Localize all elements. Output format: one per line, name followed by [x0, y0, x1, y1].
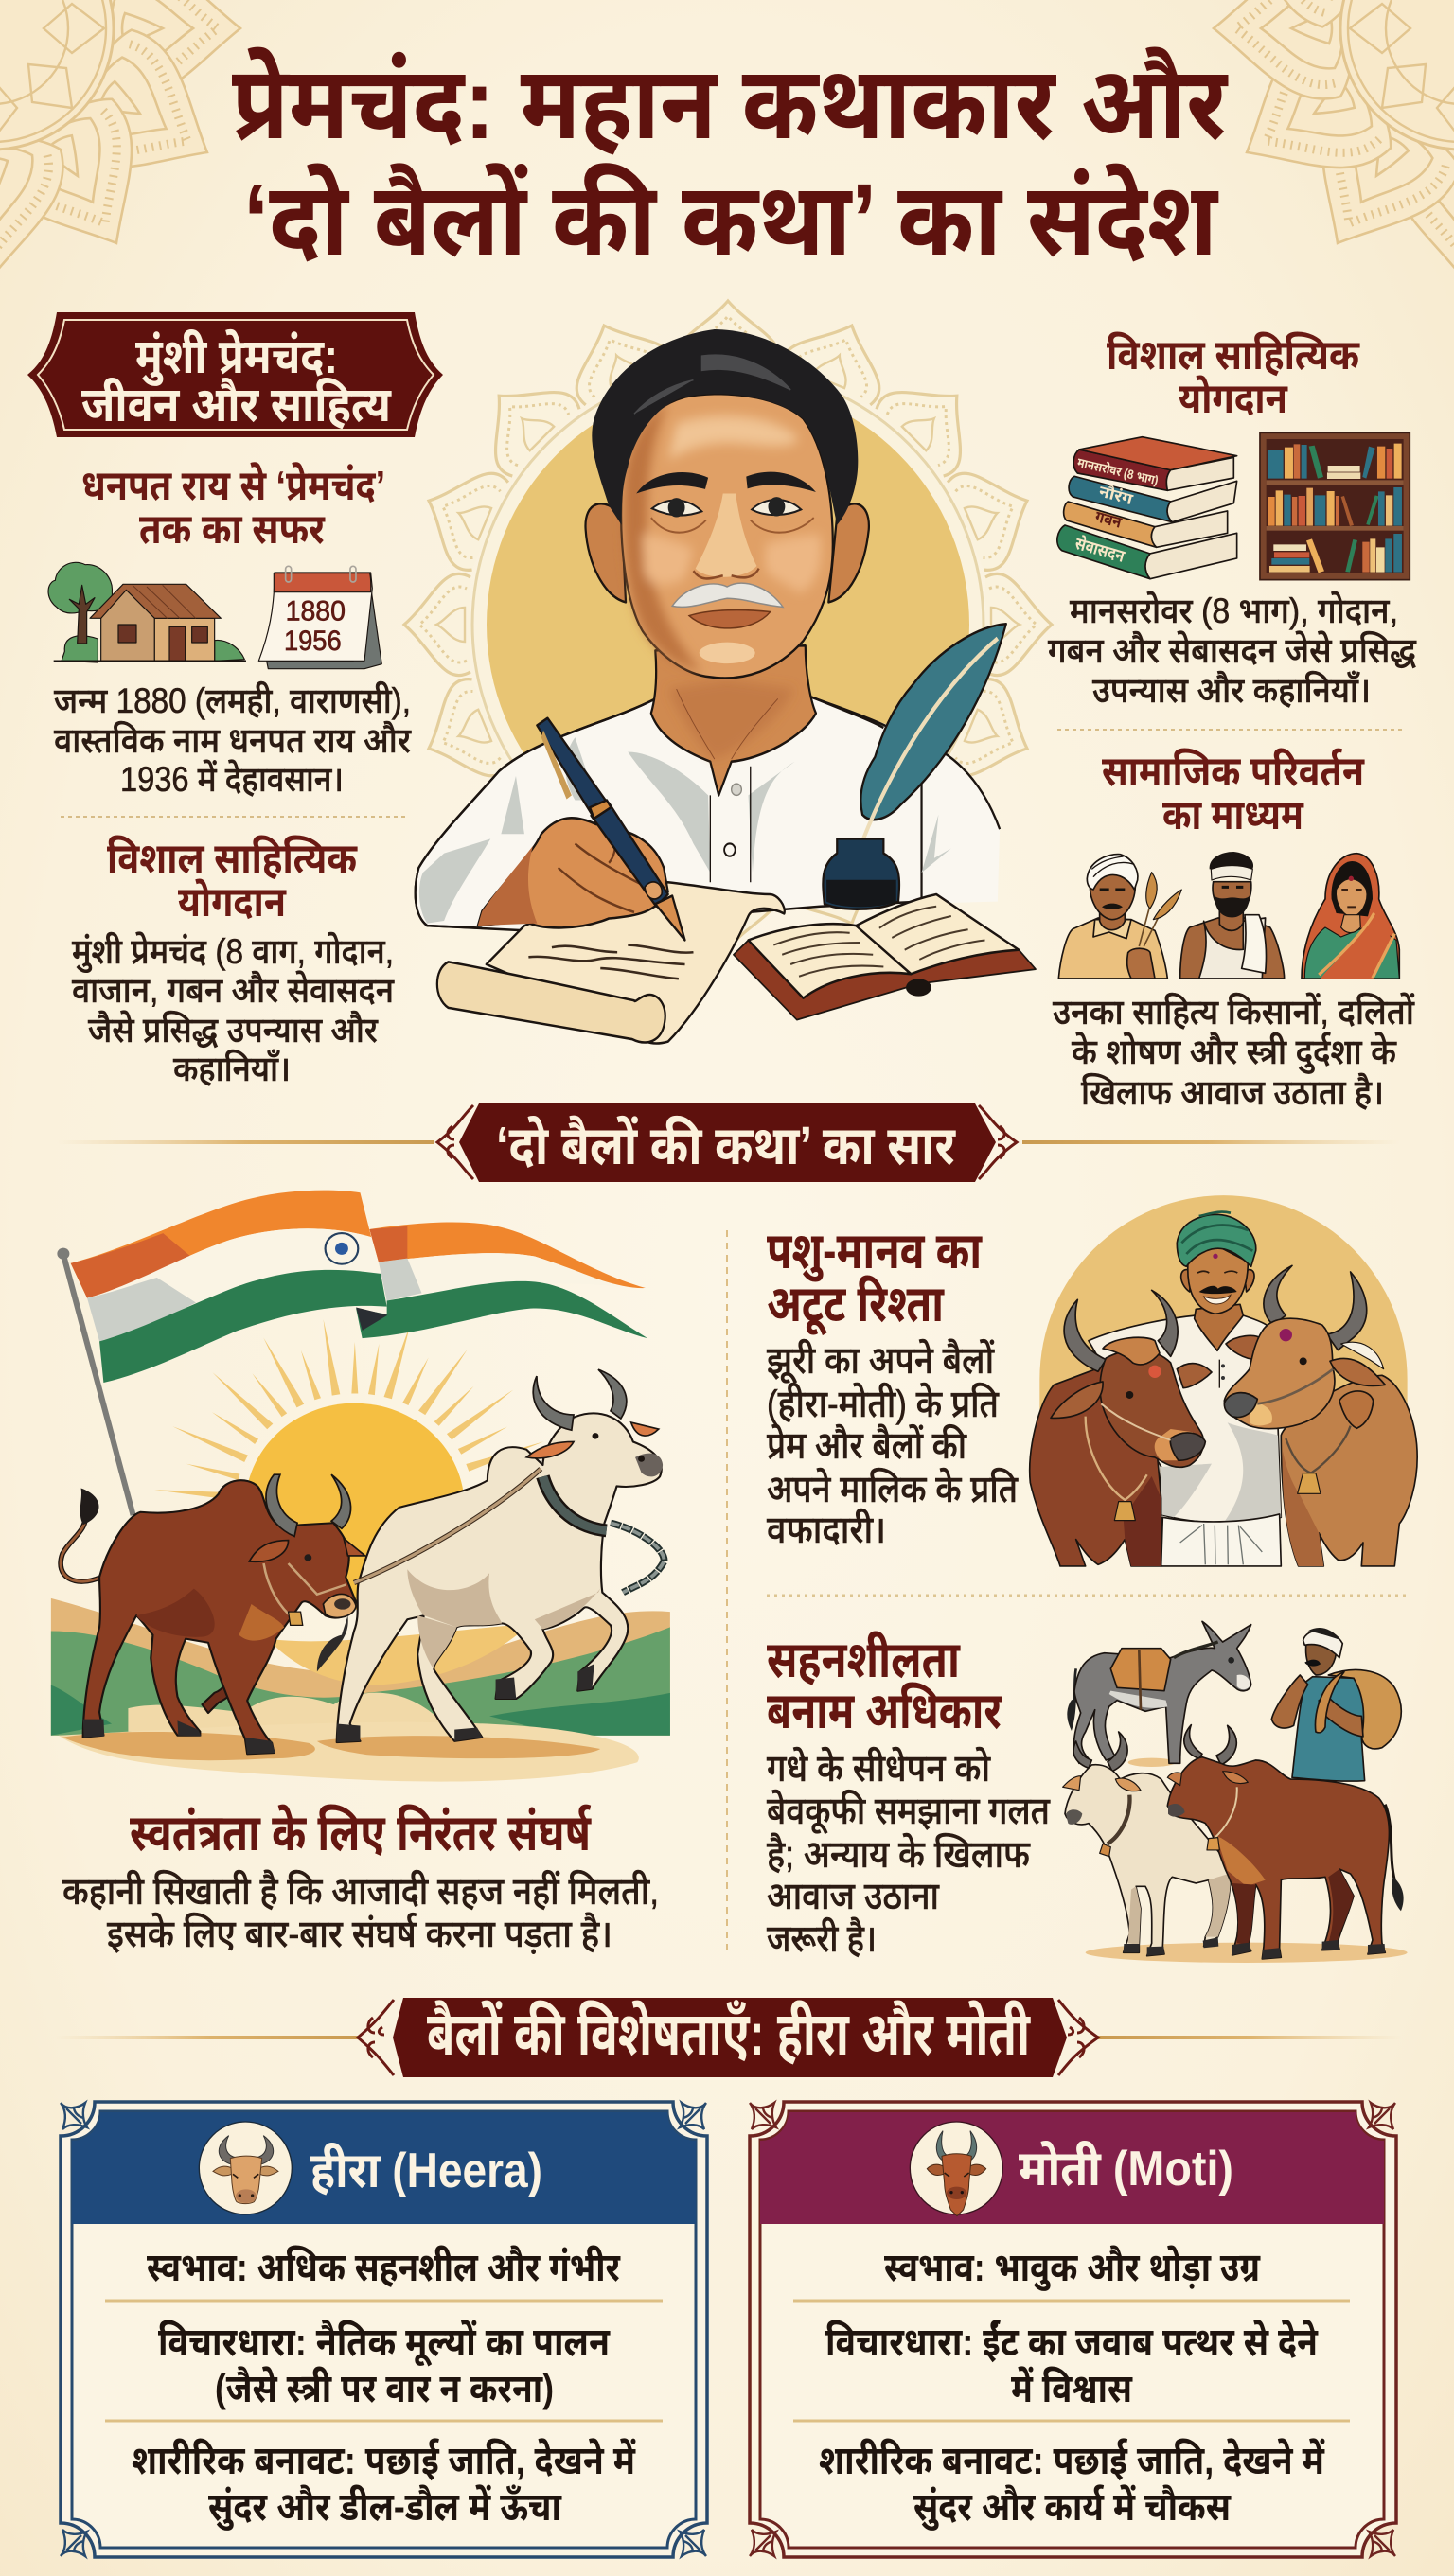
central mandala halo with golden disc — [404, 301, 1052, 948]
trait: physique: शारीरिक बनावट: पछाई जाति, देखने में — [132, 2438, 636, 2482]
text: bond: झूरी का अपने बैलों — [767, 1338, 995, 1384]
trait: ideology: में विश्वास — [1011, 2366, 1133, 2410]
left column block: Dhanpat Rai to Premchand — [48, 461, 412, 799]
icon: stack of books — [1057, 437, 1237, 579]
face shading — [623, 404, 822, 672]
trait: physique — [819, 2438, 1325, 2531]
text: literary contribution: वाजान, गबन और सेवासदन — [72, 970, 395, 1010]
text: famous works: गबन और सेबासदन जेसे प्रसिद्ध — [1048, 630, 1417, 670]
text: birth and death: वास्तविक नाम धनपत राय और — [54, 721, 412, 760]
trait: temperament: स्वभाव: अधिक सहनशील और गंभीर — [147, 2245, 621, 2289]
book spine labels: गबन — [1093, 507, 1125, 532]
calendar years: 1956 — [284, 626, 342, 657]
right column block: literary contribution — [1048, 331, 1417, 710]
farmer — [1089, 1315, 1281, 1523]
text: tolerance: है; अन्याय के खिलाफ — [767, 1832, 1031, 1876]
heading: social change: का माध्यम — [1162, 792, 1304, 838]
brown bull — [1030, 1366, 1161, 1566]
text: tolerance: आवाज उठाना — [767, 1876, 940, 1917]
section banner: traits of the bulls — [56, 1998, 1401, 2077]
text: tolerance: बेवकूफी समझाना गलत — [767, 1789, 1051, 1834]
card header — [760, 2112, 1384, 2224]
heading and text: constant struggle for freedom — [62, 1804, 659, 1955]
title — [232, 45, 1229, 276]
text: bond: प्रेम और बैलों की — [767, 1423, 967, 1467]
hand — [478, 818, 668, 927]
heading: bond: पशु-मानव का — [767, 1223, 983, 1283]
section banner: essence of the story — [56, 1103, 1401, 1182]
text: tolerance: गधे के सीधेपन को — [767, 1746, 991, 1790]
quill feather — [860, 624, 1006, 820]
card title: Heera: हीरा (Heera) — [310, 2144, 542, 2198]
heading: tolerance: बनाम अधिकार — [767, 1682, 1002, 1739]
text: famous works — [1048, 591, 1417, 710]
flag tricolour — [369, 1222, 646, 1288]
heading: journey: धनपत राय से ‘प्रेमचंद’ — [81, 461, 385, 509]
trait: temperament: स्वभाव: भावुक और थोड़ा उग्र — [884, 2245, 1261, 2291]
heading: journey — [81, 461, 385, 553]
text: voice of the oppressed: खिलाफ आवाज उठाता है। — [1081, 1073, 1384, 1112]
text: tolerance — [767, 1746, 1051, 1960]
trait: physique: सुंदर और डील-डौल में ऊँचा — [208, 2484, 562, 2531]
trait: ideology: विचारधारा: नैतिक मूल्यों का पालन — [158, 2320, 611, 2367]
trait: ideology — [825, 2320, 1319, 2410]
card frame — [61, 2102, 707, 2557]
ink bottle — [823, 838, 899, 909]
fingertip — [645, 882, 662, 899]
white bull — [317, 1369, 665, 1742]
text: bond: (हीरा-मोती) के प्रति — [767, 1382, 1000, 1425]
heading: journey: तक का सफर — [139, 506, 326, 553]
text: lesson: कहानी सिखाती है कि आजादी सहज नहीं मिलती, — [62, 1870, 659, 1913]
ears — [585, 503, 626, 602]
scroll — [487, 882, 785, 1044]
text: birth and death — [54, 681, 412, 799]
icon: Heera bull head — [199, 2122, 292, 2214]
banner: Munshi Premchand life and literature — [27, 312, 443, 437]
decorative corner mandala: top right — [1212, 0, 1454, 278]
heading: literary contribution — [1107, 331, 1360, 422]
trait: ideology — [158, 2320, 611, 2410]
card: Heera — [61, 2102, 707, 2557]
book spine labels: मानसरोवर (8 भाग) — [1076, 455, 1160, 487]
text: literary contribution: मुंशी प्रेमचंद (8 वाग, गोदान, — [72, 931, 394, 973]
heading: literary contribution: विशाल साहित्यिक — [107, 835, 358, 882]
portrait of Premchand writing — [416, 329, 1036, 1044]
open book — [734, 940, 1036, 1020]
banner: Munshi Premchand life and literature: मुंशी प्रेमचंद: — [135, 328, 338, 387]
left column block: literary contribution — [72, 835, 395, 1088]
brown bull — [1184, 1725, 1236, 1765]
text: famous works: मानसरोवर (8 भाग), गोदान, — [1070, 591, 1398, 630]
text: bond: अपने मालिक के प्रति — [767, 1467, 1019, 1510]
heading: tolerance: सहनशीलता — [767, 1631, 961, 1688]
book spine labels — [1073, 455, 1160, 566]
text: lesson: इसके लिए बार-बार संघर्ष करना पड़ता है। — [107, 1912, 612, 1955]
calendar years — [284, 595, 346, 657]
heading: literary contribution: योगदान — [178, 878, 287, 926]
tan bull — [1281, 1375, 1417, 1566]
card title: Moti: मोती (Moti) — [1019, 2142, 1233, 2197]
book spine labels: सेवासदन — [1073, 534, 1127, 566]
heading: tolerance — [767, 1631, 1002, 1739]
card header — [72, 2112, 696, 2224]
neck — [651, 645, 816, 795]
porter — [1328, 1670, 1401, 1749]
face — [621, 394, 833, 678]
trait: ideology: विचारधारा: ईंट का जवाब पत्थर से देने — [825, 2320, 1319, 2364]
heading: literary contribution: योगदान — [1179, 375, 1288, 422]
icon: village house and tree — [48, 562, 246, 662]
hair — [592, 329, 858, 525]
icon: Moti bull head — [910, 2122, 1002, 2216]
heading: social change — [1102, 748, 1365, 838]
text: literary contribution: कहानियाँ। — [173, 1049, 291, 1088]
heading: social change: सामाजिक परिवर्तन — [1102, 748, 1365, 795]
donkey — [1069, 1668, 1076, 1727]
pen — [537, 718, 609, 815]
title: ‘दो बैलों की कथा’ का संदेश — [243, 162, 1219, 276]
flag pole — [63, 1255, 133, 1515]
right column block: medium of social change — [1053, 748, 1415, 1112]
trait: physique — [132, 2438, 636, 2531]
text: voice of the oppressed: के शोषण और स्त्री दुर्दशा के — [1072, 1032, 1397, 1074]
heading: literary contribution — [107, 835, 358, 926]
text: tolerance: जरूरी है। — [767, 1917, 877, 1960]
trait: physique: सुंदर और कार्य में चौकस — [913, 2484, 1232, 2531]
text: voice of the oppressed: उनका साहित्य किसानों, दलितों — [1053, 992, 1415, 1032]
illustration: flag, rising sun and two bulls — [51, 1191, 670, 1782]
illustration: farmer with bulls — [1030, 1195, 1417, 1566]
text: famous works: उपन्यास और कहानियाँ। — [1092, 670, 1371, 710]
text: voice of the oppressed — [1053, 992, 1415, 1112]
eyes — [652, 500, 801, 516]
panel: tolerance versus rights — [767, 1621, 1408, 1963]
card: Moti — [750, 2102, 1396, 2557]
trait: physique: शारीरिक बनावट: पछाई जाति, देखने में — [819, 2438, 1325, 2482]
brows — [636, 472, 816, 494]
text: bond: वफादारी। — [767, 1509, 886, 1551]
text: literary contribution — [72, 931, 395, 1088]
text: birth and death: 1936 में देहावसान। — [120, 759, 344, 799]
white bull — [1073, 1732, 1127, 1772]
title: प्रेमचंद: महान कथाकार और — [232, 45, 1229, 160]
card frame — [750, 2102, 1396, 2557]
calendar years: 1880 — [286, 595, 346, 626]
heading: bond — [767, 1223, 983, 1336]
text: lesson — [62, 1870, 659, 1955]
kurta — [736, 697, 1000, 907]
section banner: traits of the bulls: बैलों की विशेषताएँ: हीरा और मोती — [427, 1999, 1031, 2068]
landscape — [51, 1598, 670, 1736]
text: bond — [767, 1338, 1019, 1551]
icon: desk calendar — [258, 566, 381, 669]
heading: literary contribution: विशाल साहित्यिक — [1107, 331, 1360, 379]
book spine labels: नौरंग — [1097, 483, 1135, 508]
text: birth and death: जन्म 1880 (लमही, वाराणसी), — [54, 681, 411, 720]
icon: farmer, labourer and woman — [1058, 852, 1399, 979]
heading: struggle for freedom: स्वतंत्रता के लिए निरंतर संघर्ष — [130, 1804, 592, 1861]
section banner: essence of the story: ‘दो बैलों की कथा’ का सार — [496, 1114, 956, 1176]
rays and sun — [154, 1318, 545, 1610]
trait: ideology: (जैसे स्त्री पर वार न करना) — [215, 2366, 554, 2410]
heading: bond: अटूट रिश्ता — [767, 1275, 945, 1336]
brown bull — [61, 1474, 365, 1754]
text: literary contribution: जैसे प्रसिद्ध उपन्यास और — [88, 1010, 379, 1050]
moustache and mouth — [689, 610, 771, 628]
decorative corner mandala: top left — [0, 0, 242, 278]
illustration: donkey, porter and two bulls — [1063, 1621, 1408, 1963]
panel: animal-human bond — [767, 1195, 1417, 1566]
icon: bookshelf — [1260, 432, 1410, 580]
banner: Munshi Premchand life and literature: जीवन और साहित्य — [81, 378, 392, 432]
